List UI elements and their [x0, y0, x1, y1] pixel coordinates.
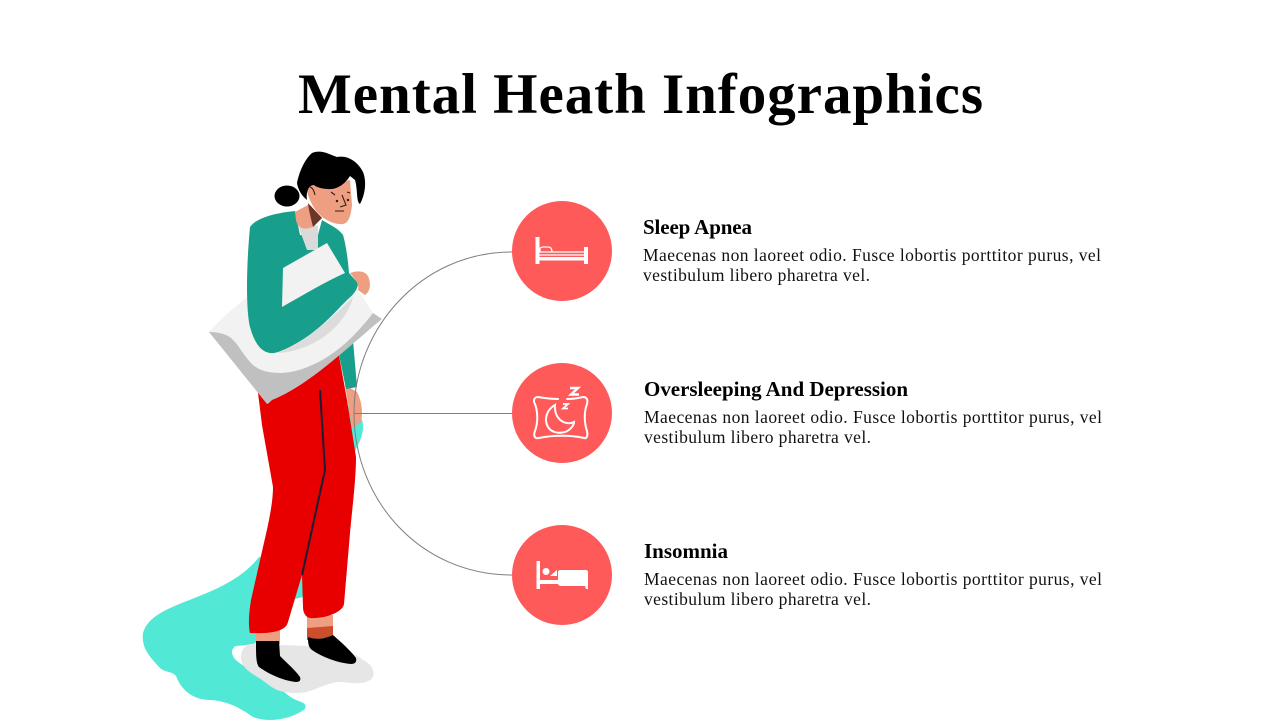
right sock: [307, 626, 333, 640]
pillow front: [209, 273, 373, 373]
jacket and arm: [247, 211, 358, 353]
description: Maecenas non laoreet odio. Fusce lobortis porttitor purus, vel: [644, 407, 1102, 427]
neck shadow: [308, 203, 322, 227]
description: Maecenas non laoreet odio. Fusce lobortis porttitor purus, vel: [644, 569, 1102, 589]
description: vestibulum libero pharetra vel.: [644, 589, 871, 609]
heading: Insomnia: [644, 539, 728, 563]
red trousers: [249, 350, 356, 633]
face: [306, 180, 352, 224]
description: Maecenas non laoreet odio. Fusce lobortis porttitor purus, vel: [643, 245, 1101, 265]
facial features: [310, 187, 350, 211]
item 1: sleep apnea: [512, 201, 1101, 301]
icon: bed: [512, 201, 612, 301]
arm shadow on pillow: [277, 297, 353, 353]
illustration: woman holding pillow: [143, 152, 382, 720]
right ankle: [307, 615, 333, 630]
pillow back: [209, 313, 382, 404]
heading: Sleep Apnea: [643, 215, 752, 239]
description: vestibulum libero pharetra vel.: [644, 427, 871, 447]
description: [643, 245, 1101, 285]
trouser seam: [302, 390, 325, 575]
left ankle: [256, 630, 280, 644]
description: [644, 407, 1102, 447]
description: [644, 569, 1102, 609]
pillow corner above arm: [282, 243, 345, 307]
connector lines: [354, 252, 512, 575]
icon: pillow with moon: [512, 363, 612, 463]
item 3: insomnia: [512, 525, 1102, 625]
icon: person in bed: [512, 525, 612, 625]
grey shirt: [296, 220, 318, 250]
hip hand: [345, 385, 362, 428]
title: Mental Heath Infographics: [298, 63, 983, 126]
hair bun: [274, 186, 300, 206]
description: vestibulum libero pharetra vel.: [643, 265, 870, 285]
item 2: oversleeping and depression: [512, 363, 1102, 463]
lower jacket: [338, 340, 357, 389]
heading: Oversleeping And Depression: [644, 377, 908, 401]
left shoe: [256, 641, 300, 682]
right shoe: [308, 635, 356, 664]
floor shadow: [241, 644, 374, 693]
neck and collar skin: [295, 205, 322, 229]
teal puddle: [143, 400, 363, 720]
hair: [297, 152, 365, 204]
hand on pillow: [350, 271, 370, 295]
